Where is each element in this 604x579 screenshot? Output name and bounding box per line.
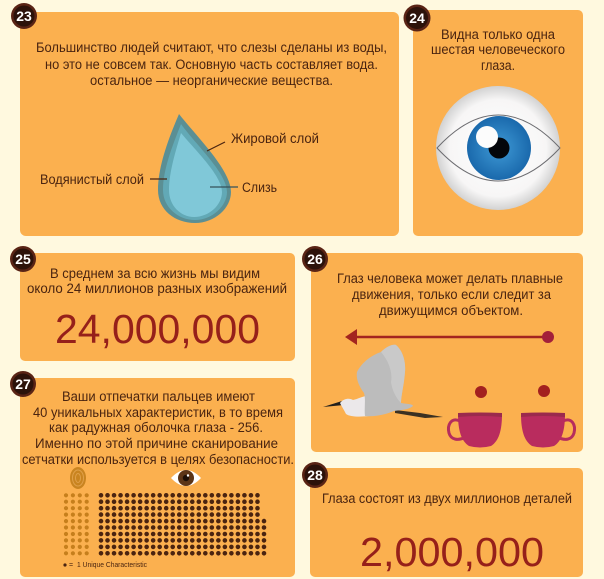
icon: flying egret [323, 345, 443, 418]
panel 28: two million parts [302, 462, 583, 577]
dot chart: 40 fingerprint characteristics [66, 495, 89, 553]
panel 25: 24 million images [10, 246, 295, 361]
badge 25: 25 [15, 251, 31, 267]
text block 28: Глаза состоят из двух миллионов деталей [322, 491, 572, 506]
marker dot above left cup [475, 386, 487, 398]
panel 26: smooth eye movement [302, 246, 583, 452]
icon: fingerprint [70, 467, 86, 489]
legend: = [69, 562, 73, 569]
panel 27: fingerprints vs iris [10, 371, 295, 577]
badge 28 [302, 462, 328, 488]
badge 23: 23 [16, 8, 32, 24]
text block 23: остальное — неорганические вещества. [90, 73, 333, 88]
badge 28: 28 [307, 467, 323, 483]
text block 27: Именно по этой причине сканирование [35, 436, 278, 451]
text block 25: около 24 миллионов разных изображений [27, 281, 287, 296]
badge 24 [404, 4, 430, 32]
panel 23: tear composition [11, 3, 399, 236]
arrow pointing left [345, 329, 554, 345]
text block 24: шестая человеческого [431, 42, 565, 57]
badge 25 [10, 246, 36, 272]
text block 25: В среднем за всю жизнь мы видим [50, 266, 260, 281]
text block 26: движения, только если следит за [352, 287, 551, 302]
callout: mucus: Слизь [242, 180, 277, 195]
text block 24: глаза. [481, 58, 515, 73]
text block 23: Большинство людей считают, что слезы сделаны из воды, [36, 40, 387, 55]
badge 27: 27 [15, 376, 31, 392]
badge 24: 24 [409, 10, 425, 26]
text block 27: 40 уникальных характеристик, в то время [33, 405, 283, 420]
text block 25 [27, 266, 287, 296]
text block 27: сетчатки используется в целях безопасности. [22, 452, 294, 467]
text block 27 [22, 389, 294, 467]
text block 23 [36, 40, 387, 88]
callout: fat layer [207, 131, 319, 151]
text block 26: движущимся объектом. [379, 303, 523, 318]
text block 24 [431, 27, 565, 73]
badge 27 [10, 371, 36, 397]
icon: tear drop [158, 114, 231, 223]
text block 23: но это не совсем так. Основную часть составляет вода. [45, 57, 378, 72]
number 24,000,000: 24,000,000 [55, 306, 260, 352]
number 2,000,000: 2,000,000 [360, 529, 544, 575]
icon: eyeball [436, 86, 560, 210]
badge 26: 26 [307, 251, 323, 267]
marker dot above right cup [538, 385, 550, 397]
text block 24: Видна только одна [441, 27, 555, 42]
icon: right cup [521, 412, 575, 448]
dot chart: 256 iris characteristics [101, 495, 265, 553]
callout: mucus [210, 180, 277, 195]
panel 24: visible eye [404, 4, 583, 236]
callout: fat layer: Жировой слой [231, 131, 319, 146]
text block 26 [337, 271, 563, 318]
icon: brown eye [171, 470, 201, 486]
icon: left cup [448, 412, 502, 448]
text block 26: Глаз человека может делать плавные [337, 271, 563, 286]
legend: 1 Unique Characteristic [77, 560, 147, 569]
text block 27: как радужная оболочка глаза - 256. [49, 420, 263, 435]
callout: water layer: Водянистый слой [40, 172, 144, 187]
badge 23 [11, 3, 37, 29]
text block 27: Ваши отпечатки пальцев имеют [62, 389, 255, 404]
badge 26 [302, 246, 328, 272]
